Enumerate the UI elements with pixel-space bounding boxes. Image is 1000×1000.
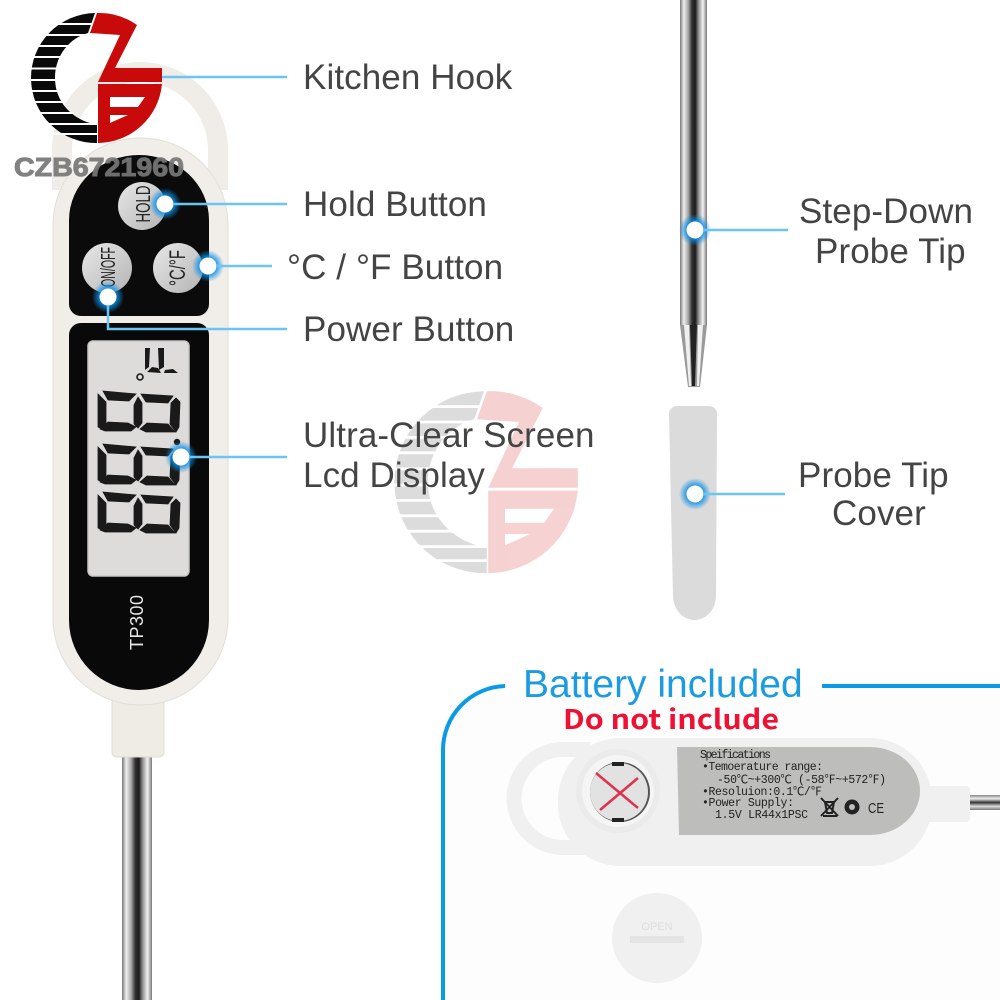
compliance marks [821, 798, 884, 817]
lcd decimal point [174, 439, 180, 445]
battery cover [612, 893, 702, 983]
hold button: HOLD [133, 186, 155, 222]
spec plate: •Resoluion:0.1℃/℉ [702, 786, 822, 799]
lcd fahrenheit symbol [137, 348, 178, 380]
battery panel [443, 663, 1000, 1000]
hold button [118, 182, 166, 230]
callout: hold button: Hold Button [303, 185, 487, 224]
neck [112, 695, 164, 757]
watermark logo [393, 391, 578, 573]
spec plate: Speifications [700, 749, 771, 762]
panel border [443, 686, 505, 1000]
body [53, 138, 228, 705]
model label: TP300 [127, 595, 147, 650]
lcd digit row 2 [98, 444, 180, 485]
kitchen hook loop [62, 72, 218, 190]
rear probe [968, 795, 1000, 810]
callout: probe cover: Cover [832, 494, 926, 533]
spec plate [677, 747, 920, 835]
spec plate: •Temoerature range: [702, 761, 823, 774]
battery compartment [576, 749, 660, 833]
callout: probe tip: Step-Down [799, 192, 973, 231]
battery cover: OPEN [641, 921, 673, 933]
battery heading: Battery included [523, 663, 803, 706]
callout: temperature unit button: °C / °F Button [287, 248, 503, 287]
callout: lcd display: Lcd Display [303, 456, 485, 495]
spec plate: 1.5V LR44x1PSC [715, 809, 808, 822]
callout: lcd display: Ultra-Clear Screen [303, 416, 595, 455]
thermometer front [53, 72, 228, 1000]
spec plate: -50℃~+300℃ (-58℉~+572℉) [717, 774, 886, 787]
metal probe [122, 755, 152, 1000]
red note: Do not include [563, 698, 779, 737]
display panel [69, 323, 209, 690]
celsius fahrenheit button [153, 243, 203, 293]
rear neck [925, 786, 970, 822]
on/off button [82, 243, 132, 293]
callout: probe cover [679, 456, 949, 533]
compliance marks: CE [868, 800, 884, 817]
lcd digit row 3 [98, 492, 180, 533]
callout: probe cover: Probe Tip [798, 456, 949, 495]
lcd digit row 1 [98, 391, 180, 432]
rear hook [514, 750, 590, 848]
callout: temperature unit button [192, 248, 503, 287]
on/off button: ON/OFF [98, 247, 120, 287]
callout: power button [92, 281, 514, 349]
spec plate: •Power Supply: [702, 797, 794, 810]
logo store name: CZB6721960 [14, 152, 184, 182]
callout: power button: Power Button [303, 310, 514, 349]
upper probe [680, 0, 707, 387]
lcd screen [88, 341, 189, 576]
panel background [443, 686, 1000, 1000]
logo [30, 13, 162, 143]
callout: probe tip: Probe Tip [815, 232, 966, 271]
callout: kitchen hook: Kitchen Hook [303, 58, 513, 97]
callout: lcd display [165, 416, 595, 495]
celsius fahrenheit button: °C/°F [165, 250, 190, 286]
rear body [558, 738, 932, 866]
probe tip cover [669, 406, 717, 620]
callout: probe tip [679, 192, 973, 271]
callout: hold button [149, 185, 487, 224]
button panel [69, 155, 209, 316]
